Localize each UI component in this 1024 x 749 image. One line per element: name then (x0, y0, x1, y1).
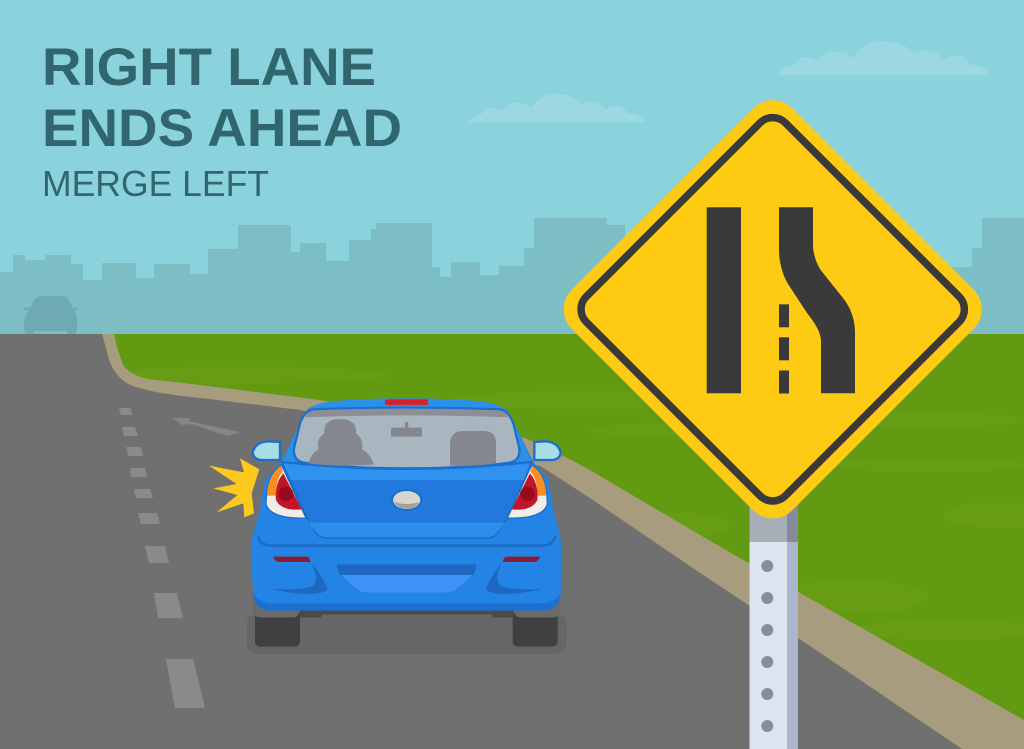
cloud: upper right (777, 41, 991, 75)
grass field (0, 334, 1024, 749)
blue car rear view (209, 398, 567, 654)
right tail light (507, 465, 547, 518)
car body (251, 398, 562, 610)
curb (102, 334, 1024, 749)
post bolt holes (761, 560, 773, 732)
lower bumper sides (253, 593, 561, 617)
roof highlight (282, 398, 532, 462)
rear reflectors (273, 557, 540, 562)
body crease (258, 536, 555, 546)
rear-view mirror (391, 422, 422, 437)
car badge (391, 489, 422, 511)
left tail light (indicator on) (266, 465, 306, 518)
car ground shadow (247, 613, 567, 654)
distant car silhouette (24, 296, 78, 334)
rear window (294, 408, 519, 468)
subheading: MERGE LEFT (42, 163, 269, 204)
indicator flash (209, 458, 259, 517)
left wing mirror (253, 441, 280, 460)
title block (42, 38, 402, 204)
left lane symbol (707, 207, 741, 393)
cloud: centre (468, 94, 645, 122)
bumper vents (270, 563, 543, 594)
high-mount brake light (385, 399, 428, 405)
dashed lane markings (119, 408, 205, 708)
sky background (0, 0, 1024, 335)
heading line 1: RIGHT LANE (42, 38, 376, 97)
underbody (298, 608, 515, 617)
sign border (574, 110, 972, 508)
merging lane symbol (779, 207, 855, 393)
rear wheels (255, 610, 558, 647)
trunk lower highlight (308, 523, 505, 537)
trunk lid (282, 462, 532, 538)
city skyline silhouette (0, 218, 1024, 335)
road sign: right lane ends (552, 89, 993, 530)
passenger seat (450, 431, 496, 466)
heading line 2: ENDS AHEAD (42, 99, 402, 158)
trunk upper highlight (283, 463, 530, 480)
window tint strip (303, 409, 510, 417)
centre dashes (779, 304, 789, 394)
road surface (0, 334, 962, 749)
grass highlights (90, 367, 1024, 640)
driver silhouette (308, 419, 374, 466)
bumper lower shade (253, 593, 561, 611)
sign post (750, 505, 798, 749)
licence plate recess (337, 564, 477, 592)
road arrow (172, 418, 240, 436)
right wing mirror (534, 441, 561, 460)
sign face (552, 89, 993, 530)
